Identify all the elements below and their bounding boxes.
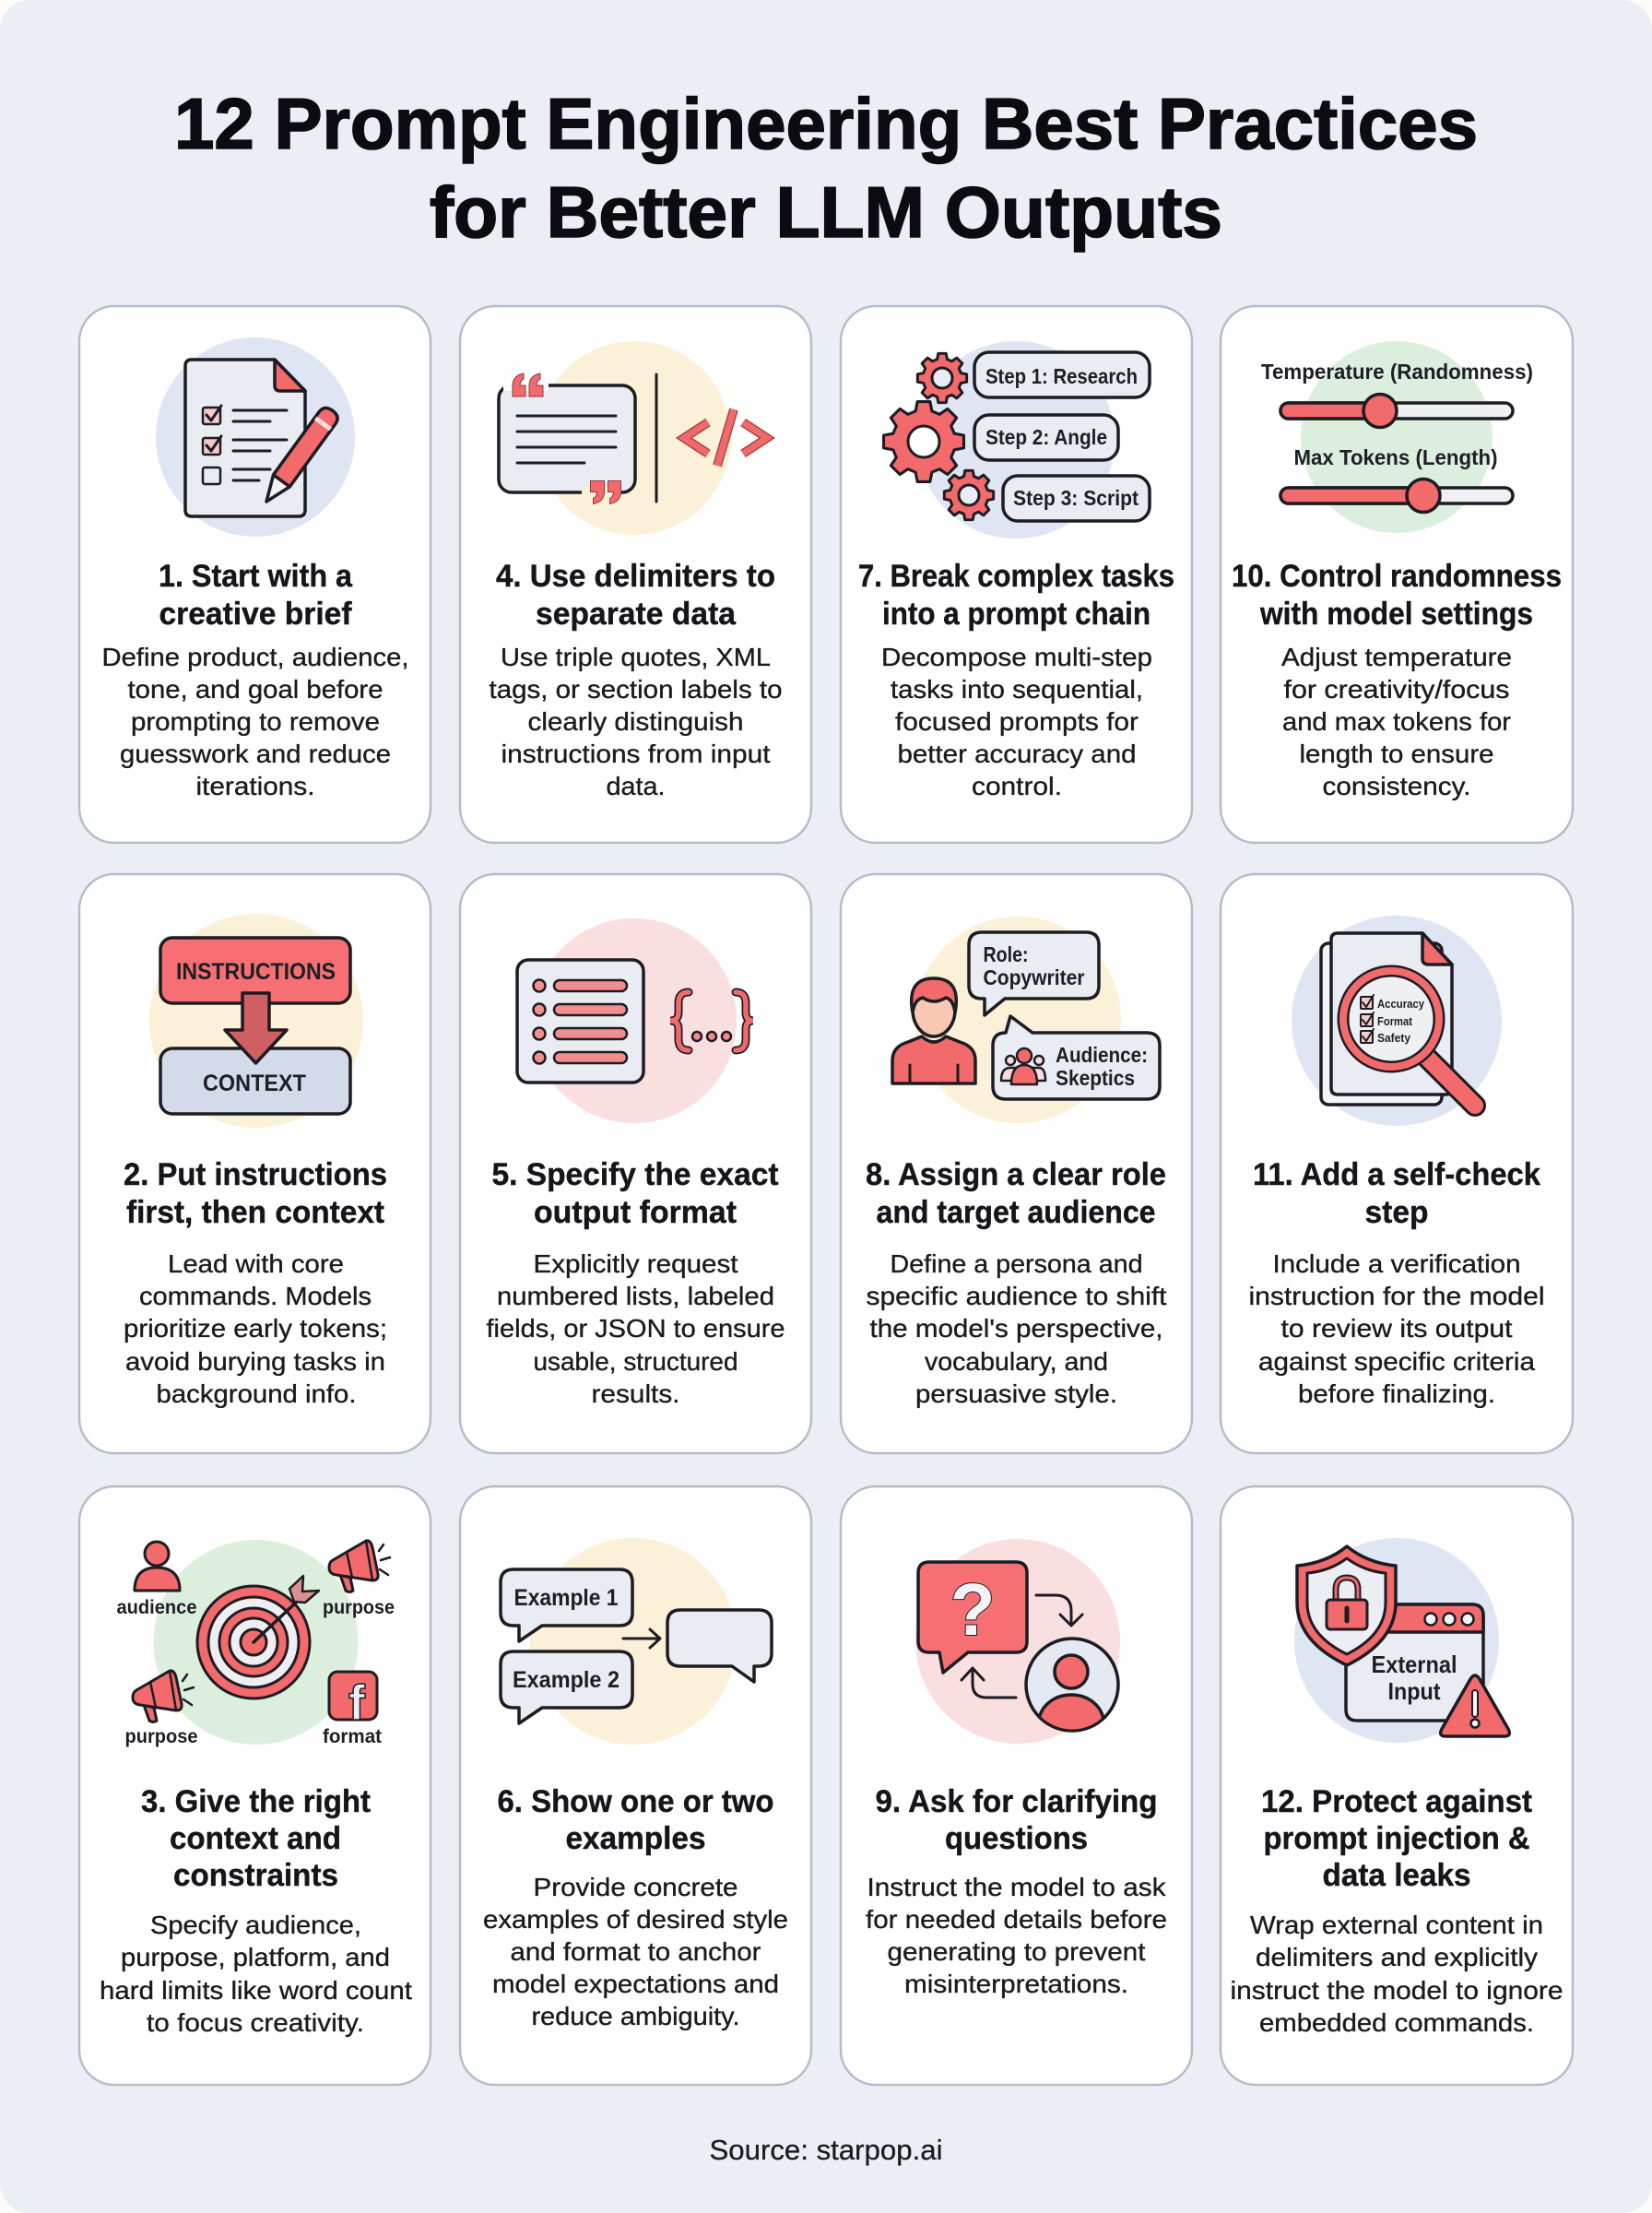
heading: examples — [566, 1821, 706, 1856]
body text — [100, 1911, 412, 2037]
body text: the model's perspective, — [870, 1314, 1163, 1343]
body text: against specific criteria — [1258, 1347, 1535, 1376]
body text: Define product, audience, — [101, 643, 409, 671]
heading: first, then context — [126, 1195, 384, 1230]
heading — [141, 1784, 371, 1893]
body text: tone, and goal before — [127, 675, 384, 704]
title: 12 Prompt Engineering Best Practices — [174, 83, 1478, 164]
panel: 8. Assign a clear role — [841, 874, 1192, 1453]
panel: 11. Add a self-check — [1221, 874, 1573, 1453]
body text: Wrap external content in — [1250, 1911, 1543, 1939]
body text: better accuracy and — [898, 740, 1136, 768]
icon: sliders: Temperature (Randomness) — [1261, 360, 1533, 384]
heading: 2. Put instructions — [124, 1157, 387, 1192]
panel: 7. Break complex tasks — [841, 306, 1192, 843]
body text — [124, 1249, 387, 1408]
icon: document and magnifier: Safety — [1377, 1031, 1411, 1045]
body text: model expectations and — [492, 1970, 779, 1998]
panel: 2. Put instructions first — [79, 874, 431, 1453]
icon: shield, window and warning — [1294, 1538, 1509, 1743]
heading: and target audience — [876, 1195, 1156, 1230]
panel: 9. Ask for clarifying questions — [841, 1486, 1192, 2085]
icon: target with labels: audience — [116, 1597, 197, 1618]
body text: to focus creativity. — [147, 2008, 364, 2037]
body text: Decompose multi-step — [881, 643, 1152, 671]
heading — [866, 1157, 1166, 1230]
body text: tasks into sequential, — [891, 675, 1143, 704]
icon: target with labels: purpose — [125, 1726, 197, 1747]
body text: consistency. — [1322, 772, 1471, 800]
heading: 4. Use delimiters to — [496, 559, 775, 594]
panel: 6. Show one or two examples — [460, 1486, 811, 2085]
icon: question and user loop — [915, 1539, 1120, 1750]
icon: persona and audience: Skeptics — [1056, 1066, 1135, 1090]
icon: delimiters — [499, 341, 767, 535]
icon: gears and steps: Step 1: Research — [985, 364, 1138, 388]
icon: gears and steps: Step 2: Angle — [985, 425, 1107, 449]
title — [174, 83, 1478, 253]
heading: output format — [534, 1195, 737, 1230]
body text — [1248, 1249, 1545, 1408]
icon: target with labels: f — [348, 1675, 366, 1731]
icon: target with labels: purpose — [323, 1597, 395, 1618]
panel: 1. Start with a creative brief — [79, 306, 431, 843]
icon: question and user loop: ? — [950, 1568, 995, 1651]
heading: 8. Assign a clear role — [866, 1157, 1166, 1192]
body text: Define a persona and — [891, 1249, 1143, 1278]
body text — [867, 1249, 1167, 1408]
heading: 11. Add a self-check — [1253, 1157, 1540, 1192]
heading: 5. Specify the exact — [492, 1157, 778, 1192]
body text: avoid burying tasks in — [125, 1347, 385, 1376]
body text: background info. — [157, 1379, 356, 1408]
heading: 7. Break complex tasks — [858, 559, 1174, 594]
body text — [1281, 643, 1512, 800]
heading: 10. Control randomness — [1232, 559, 1562, 594]
body text: embedded commands. — [1259, 2008, 1534, 2037]
icon: list and braces — [517, 918, 753, 1123]
icon: gears and steps: Step 3: Script — [1013, 486, 1139, 510]
body text — [487, 1249, 785, 1408]
icon: shield, window and warning: External — [1372, 1651, 1457, 1678]
body text: Explicitly request — [533, 1249, 738, 1278]
body text: iterations. — [195, 772, 315, 800]
body text: to review its output — [1281, 1314, 1513, 1343]
heading: 6. Show one or two — [498, 1784, 774, 1819]
body text: instruction for the model — [1248, 1282, 1545, 1310]
body text: purpose, platform, and — [121, 1943, 390, 1971]
icon: sliders: Max Tokens (Length) — [1294, 445, 1497, 469]
body text — [881, 643, 1152, 800]
icon: example bubbles: Example 1 — [514, 1585, 619, 1611]
body text: for creativity/focus — [1283, 675, 1510, 704]
body text: examples of desired style — [483, 1905, 788, 1934]
heading: step — [1364, 1195, 1429, 1230]
body text: prompting to remove — [131, 707, 380, 736]
body text: tags, or section labels to — [489, 675, 782, 704]
icon: checklist and pencil — [156, 337, 355, 537]
heading — [124, 1157, 387, 1230]
heading: 3. Give the right — [141, 1784, 371, 1819]
body text: instruct the model to ignore — [1230, 1976, 1564, 2005]
body text: hard limits like word count — [100, 1976, 412, 2005]
body text: control. — [972, 772, 1062, 800]
heading — [159, 559, 353, 632]
body text — [101, 643, 409, 800]
body text — [483, 1873, 788, 2030]
body text: Use triple quotes, XML — [501, 643, 771, 671]
icon: document and magnifier: Accuracy — [1377, 997, 1425, 1011]
icon: persona and audience: Audience: — [1056, 1043, 1148, 1067]
panel: 5. Specify output format — [460, 874, 811, 1453]
body text: Provide concrete — [533, 1873, 738, 1901]
panel: 3. Give the right context — [79, 1486, 431, 2085]
icon: gears and steps — [884, 341, 1150, 538]
body text: vocabulary, and — [925, 1347, 1108, 1376]
icon: document and magnifier: Format — [1377, 1014, 1413, 1028]
heading: 12. Protect against — [1261, 1784, 1532, 1819]
body text: Specify audience, — [150, 1911, 361, 1939]
icon: sliders — [1261, 341, 1533, 533]
heading: into a prompt chain — [882, 597, 1150, 632]
body text: clearly distinguish — [527, 707, 743, 736]
heading: context and — [170, 1821, 341, 1856]
body text: persuasive style. — [915, 1379, 1117, 1408]
heading — [496, 559, 775, 632]
icon: instructions over context: CONTEXT — [203, 1071, 306, 1096]
body text: for needed details before — [866, 1905, 1167, 1934]
body text: focused prompts for — [895, 707, 1139, 736]
body text: prioritize early tokens; — [124, 1314, 387, 1343]
heading — [1261, 1784, 1532, 1893]
heading — [858, 559, 1174, 632]
source line: Source: starpop.ai — [710, 2134, 942, 2166]
heading — [492, 1157, 778, 1230]
heading: creative brief — [159, 597, 352, 632]
heading: constraints — [173, 1858, 338, 1893]
icon: target with labels — [116, 1540, 395, 1747]
body text: commands. Models — [139, 1282, 372, 1310]
icon: instructions over context: INSTRUCTIONS — [176, 959, 336, 985]
panel: 12. Protect against prompt injection — [1221, 1486, 1573, 2085]
body text: misinterpretations. — [904, 1970, 1128, 1998]
body text: delimiters and explicitly — [1256, 1943, 1538, 1971]
heading — [498, 1784, 774, 1856]
heading: 1. Start with a — [159, 559, 353, 594]
body text: Include a verification — [1272, 1249, 1521, 1278]
body text: before finalizing. — [1298, 1379, 1495, 1408]
body text: usable, structured — [533, 1347, 738, 1376]
heading — [1232, 559, 1562, 632]
icon: example bubbles: Example 2 — [513, 1667, 620, 1693]
panel: 4. Use delimiters — [460, 306, 811, 843]
title: for Better LLM Outputs — [430, 172, 1222, 253]
body text: Instruct the model to ask — [867, 1873, 1167, 1901]
body text: and format to anchor — [511, 1937, 761, 1966]
body text: results. — [592, 1379, 680, 1408]
icon: target with labels: format — [323, 1726, 382, 1747]
icon: document and magnifier — [1292, 916, 1502, 1126]
body text: guesswork and reduce — [120, 740, 391, 768]
icon: persona and audience: Role: — [983, 942, 1029, 966]
heading: questions — [945, 1821, 1088, 1856]
heading — [876, 1784, 1158, 1856]
body text — [489, 643, 782, 800]
heading: separate data — [536, 597, 737, 632]
body text: and max tokens for — [1282, 707, 1511, 736]
heading — [1253, 1157, 1540, 1230]
panel: 10. Control randomness — [1221, 306, 1573, 843]
icon: persona and audience — [892, 917, 1160, 1123]
body text: data. — [607, 772, 666, 800]
body text — [1230, 1911, 1564, 2037]
body text: fields, or JSON to ensure — [487, 1314, 785, 1343]
heading: data leaks — [1322, 1858, 1471, 1893]
body text: generating to prevent — [887, 1937, 1146, 1966]
body text: specific audience to shift — [867, 1282, 1167, 1310]
heading: prompt injection & — [1263, 1821, 1530, 1856]
icon: instructions over context — [149, 914, 363, 1128]
body text: reduce ambiguity. — [531, 2002, 739, 2030]
heading: 9. Ask for clarifying — [876, 1784, 1158, 1819]
body text: instructions from input — [502, 740, 771, 768]
body text: Adjust temperature — [1281, 643, 1512, 671]
icon: example bubbles — [501, 1538, 772, 1745]
icon: persona and audience: Copywriter — [983, 965, 1085, 989]
body text: Lead with core — [168, 1249, 344, 1278]
body text: numbered lists, labeled — [497, 1282, 774, 1310]
body text: length to ensure — [1300, 740, 1493, 768]
heading: with model settings — [1259, 597, 1533, 632]
body text — [866, 1873, 1167, 1998]
icon: shield, window and warning: Input — [1388, 1677, 1441, 1705]
